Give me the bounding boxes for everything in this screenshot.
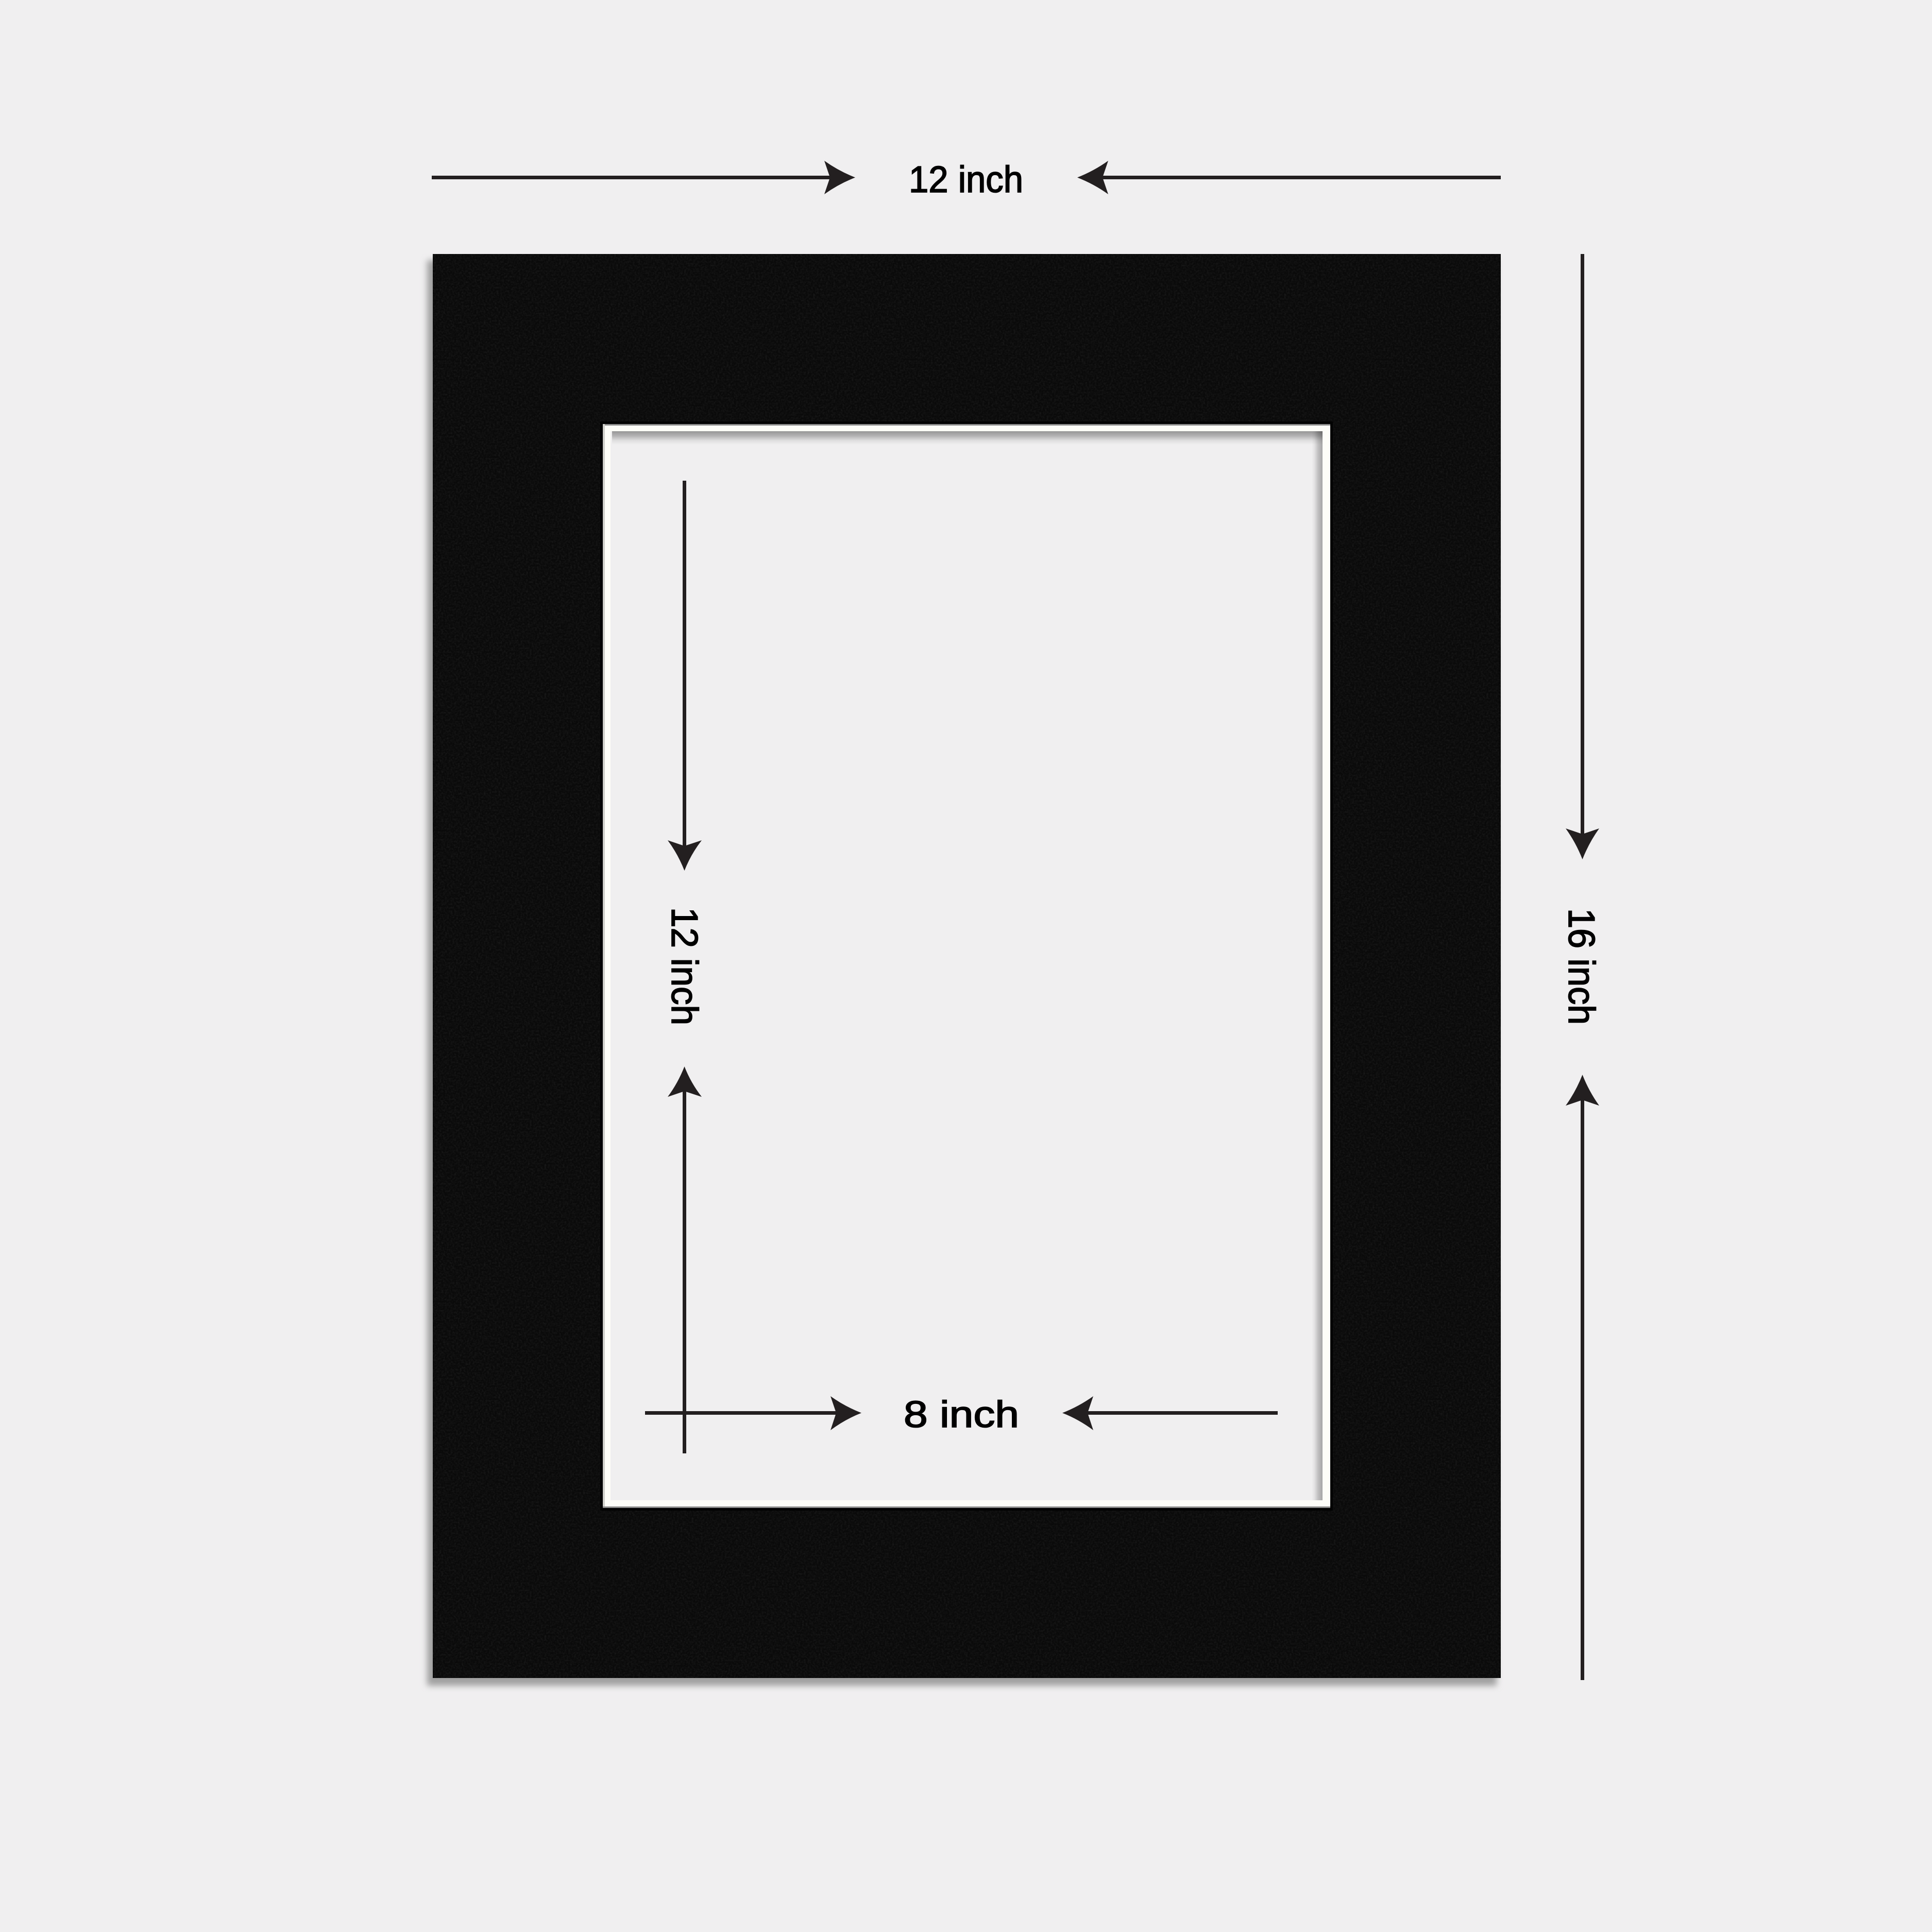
- panel: black photo mat: [427, 254, 1501, 1686]
- white bevel: [603, 424, 1330, 1508]
- right arrowhead: [1077, 161, 1108, 194]
- lower line: [683, 1086, 686, 1453]
- dimension: outer height 16 inch: [1561, 254, 1602, 1680]
- dimension: opening width 8 inch: [645, 1394, 1278, 1435]
- lower arrowhead: [668, 1066, 702, 1097]
- upper line: [1581, 254, 1584, 841]
- window opening: [611, 431, 1323, 1500]
- mat drop shadow: [427, 260, 1497, 1686]
- inner right shadow: [1312, 431, 1323, 1500]
- mat texture: [433, 254, 1501, 1678]
- left line: [645, 1411, 841, 1415]
- label: 12 inch: [909, 159, 1023, 200]
- lower line: [1581, 1095, 1584, 1680]
- mat board: [433, 254, 1501, 1678]
- upper arrowhead: [1566, 828, 1599, 859]
- inner top shadow: [612, 431, 1323, 445]
- dimension: opening height 12 inch: [664, 481, 705, 1453]
- lower arrowhead: [1566, 1075, 1599, 1106]
- left arrowhead: [831, 1396, 861, 1430]
- dark edge around opening: [600, 421, 1333, 1511]
- upper arrowhead: [668, 840, 702, 871]
- bevel top edge: [603, 424, 1330, 426]
- label: 8 inch: [904, 1394, 1019, 1435]
- right line: [1097, 176, 1501, 179]
- right arrowhead: [1062, 1396, 1093, 1430]
- bevel left edge: [603, 424, 605, 1508]
- left arrowhead: [824, 161, 855, 194]
- upper line: [683, 481, 686, 852]
- label: 12 inch: [664, 907, 705, 1025]
- left line: [432, 176, 834, 179]
- bevel bottom edge: [603, 1506, 1330, 1508]
- dimension: outer width 12 inch: [432, 159, 1501, 200]
- right line: [1082, 1411, 1278, 1415]
- label: 16 inch: [1561, 908, 1602, 1025]
